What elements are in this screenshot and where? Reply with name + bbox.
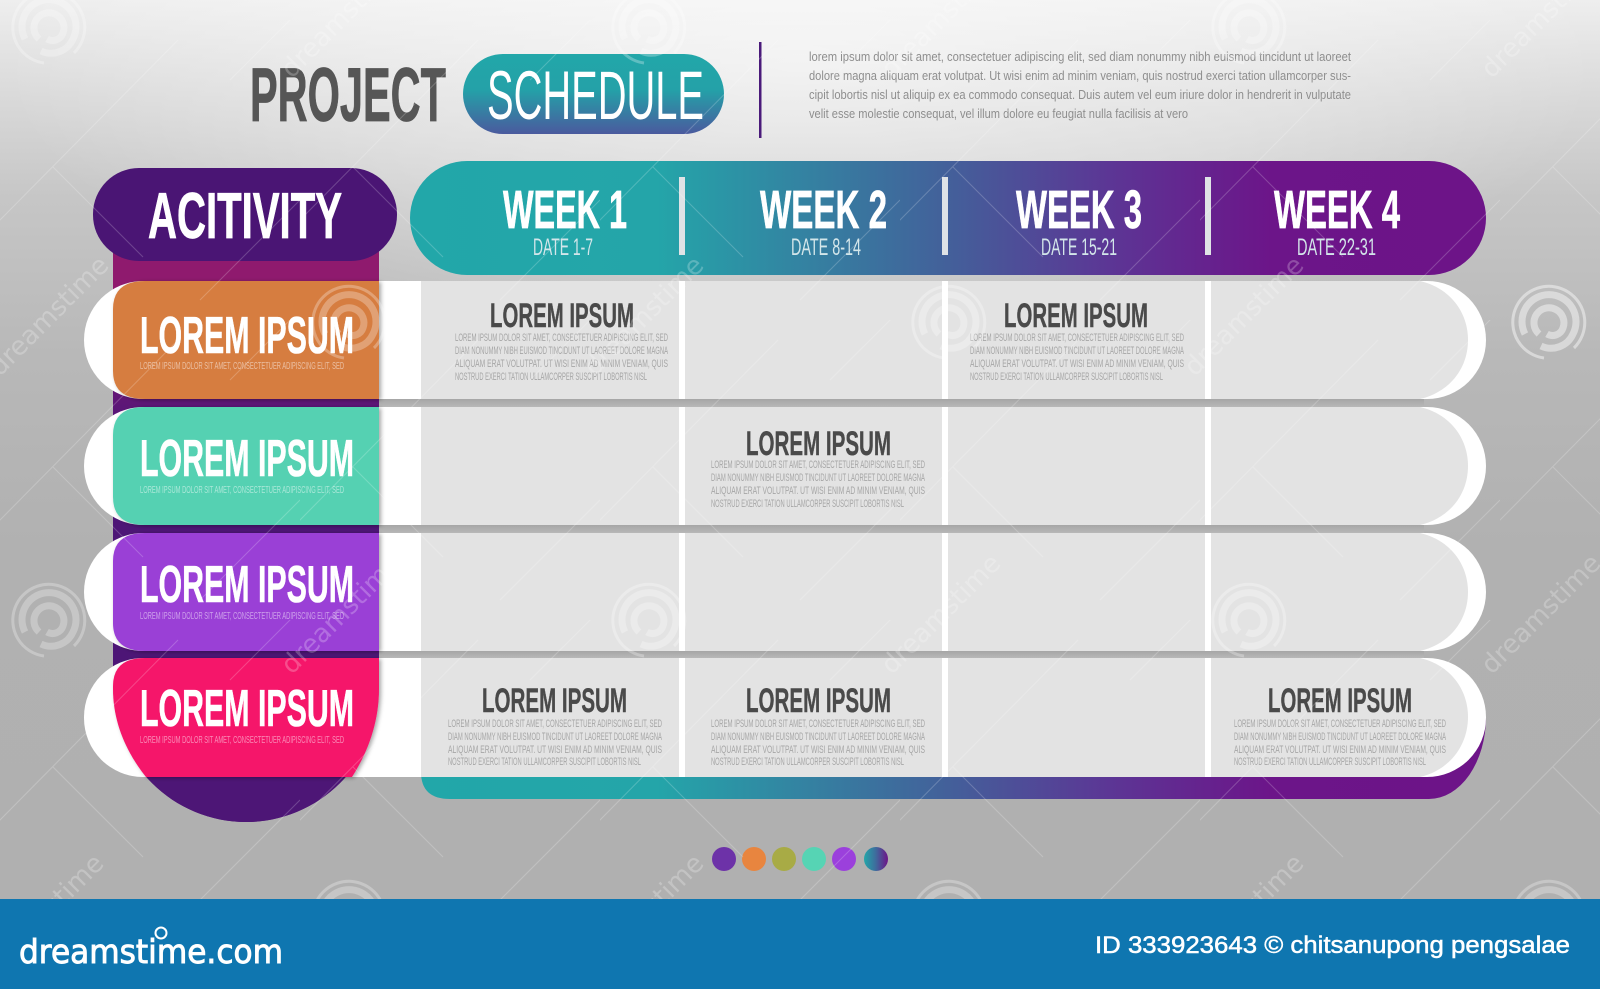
cell: row 4 week 2: LOREM IPSUM	[746, 682, 891, 720]
week 3: WEEK 3	[1016, 180, 1142, 240]
footer credit: ID 333923643 © chitsanupong pengsalae	[1095, 932, 1570, 959]
cell: row 4 week 4: LOREM IPSUM	[1268, 682, 1412, 720]
watermark: dreamstime	[579, 251, 710, 382]
cell: row 4 week 1: NOSTRUD EXERCI TATION ULLAMCORPER SUSCIPIT LOBORTIS NISL	[448, 756, 641, 768]
cell: row 1 week 1: ALIQUAM ERAT VOLUTPAT. UT WISI ENIM AD MINIM VENIAM, QUIS	[455, 358, 668, 370]
cell: row 4 week 2: NOSTRUD EXERCI TATION ULLAMCORPER SUSCIPIT LOBORTIS NISL	[711, 756, 904, 768]
row 2 cell separators	[679, 407, 1211, 525]
week 2	[760, 180, 887, 261]
activity column backing	[113, 240, 379, 822]
cell: row 4 week 2	[711, 682, 925, 768]
cell: row 4 week 4: ALIQUAM ERAT VOLUTPAT. UT WISI ENIM AD MINIM VENIAM, QUIS	[1234, 744, 1446, 756]
week 1	[503, 180, 627, 261]
label: row 1 orange: LOREM IPSUM DOLOR SIT AMET, CONSECTETUER ADIPISCING ELIT, SED	[140, 361, 344, 372]
cell: row 1 week 3: LOREM IPSUM	[1004, 297, 1148, 335]
watermark: dreamstime	[579, 849, 710, 980]
row 4	[84, 658, 1486, 777]
week 2: DATE 8-14	[791, 234, 861, 261]
header	[250, 42, 1351, 138]
week header bar	[410, 161, 1486, 275]
row 3 cell separators	[679, 533, 1211, 651]
week separators	[679, 177, 1211, 255]
label: row 4 pink: LOREM IPSUM	[140, 680, 354, 738]
row 1	[84, 281, 1486, 399]
cell: row 2 week 2: NOSTRUD EXERCI TATION ULLAMCORPER SUSCIPIT LOBORTIS NISL	[711, 498, 904, 510]
cell: row 4 week 1: LOREM IPSUM DOLOR SIT AMET, CONSECTETUER ADIPISCING ELIT, SED	[448, 718, 662, 730]
intro text: cipit lobortis nisl ut aliquip ex ea commodo consequat. Duis autem vel eum iriure dolor in hendrerit in vulputate	[809, 88, 1351, 102]
row 3	[84, 533, 1486, 651]
week 2: WEEK 2	[760, 180, 887, 240]
watermark: dreamstime	[876, 549, 1007, 680]
cell: row 4 week 1: ALIQUAM ERAT VOLUTPAT. UT WISI ENIM AD MINIM VENIAM, QUIS	[448, 744, 662, 756]
activity header: ACITIVITY	[148, 179, 342, 252]
label: row 3 purple: LOREM IPSUM DOLOR SIT AMET, CONSECTETUER ADIPISCING ELIT, SED	[140, 611, 344, 622]
title pill: SCHEDULE: SCHEDULE	[487, 57, 704, 134]
row 2	[84, 407, 1486, 525]
label: row 4 pink	[113, 658, 379, 777]
footer bar	[0, 899, 1600, 989]
header divider	[759, 42, 762, 138]
label: row 2 teal: LOREM IPSUM DOLOR SIT AMET, CONSECTETUER ADIPISCING ELIT, SED	[140, 485, 344, 496]
label: row 1 orange	[113, 281, 379, 399]
cell: row 1 week 3: DIAM NONUMMY NIBH EUISMOD TINCIDUNT UT LAOREET DOLORE MAGNA	[970, 345, 1184, 357]
cell: row 1 week 1: NOSTRUD EXERCI TATION ULLAMCORPER SUSCIPIT LOBORTIS NISL	[455, 371, 647, 383]
cell: row 2 week 2	[711, 425, 925, 510]
intro text: velit esse molestie consequat, vel illum dolore eu feugiat nulla facilisis at vero	[809, 107, 1188, 121]
title: PROJECT: PROJECT	[250, 53, 446, 138]
title pill: SCHEDULE	[463, 54, 724, 134]
intro text	[809, 50, 1351, 121]
cell: row 4 week 1	[448, 682, 662, 768]
intro text: dolore magna aliquam erat volutpat. Ut wisi enim ad minim veniam, quis nostrud exerci tation ullamcorper sus-	[809, 69, 1351, 83]
week 1: DATE 1-7	[533, 234, 593, 261]
cell: row 2 week 2: LOREM IPSUM	[746, 425, 891, 463]
week 4: DATE 22-31	[1297, 234, 1376, 261]
label: row 2 teal: LOREM IPSUM	[140, 430, 354, 488]
cell: row 1 week 3: LOREM IPSUM DOLOR SIT AMET, CONSECTETUER ADIPISCING ELIT, SED	[970, 332, 1184, 344]
week 3: DATE 15-21	[1041, 234, 1117, 261]
watermark: dreamstime	[276, 549, 407, 680]
cell: row 2 week 2: DIAM NONUMMY NIBH EUISMOD TINCIDUNT UT LAOREET DOLORE MAGNA	[711, 472, 925, 484]
watermark: dreamstime	[1179, 849, 1310, 980]
label: row 2 teal	[113, 407, 379, 525]
label: row 1 orange: LOREM IPSUM	[140, 307, 354, 365]
cell: row 4 week 4: NOSTRUD EXERCI TATION ULLAMCORPER SUSCIPIT LOBORTIS NISL	[1234, 756, 1426, 768]
watermark: dreamstime	[1179, 251, 1310, 382]
column lower purple	[146, 777, 346, 822]
week 1: WEEK 1	[503, 180, 627, 240]
row 1 cell separators	[679, 281, 1211, 399]
row 4 cell separators	[679, 658, 1211, 777]
cell: row 1 week 1: LOREM IPSUM DOLOR SIT AMET, CONSECTETUER ADIPISCING ELIT, SED	[455, 332, 668, 344]
intro text: lorem ipsum dolor sit amet, consectetuer adipiscing elit, sed diam nonummy nibh euismod tincidunt ut laoreet	[809, 50, 1351, 64]
week 4: WEEK 4	[1274, 180, 1400, 240]
row shadows	[379, 399, 1424, 658]
week 4	[1274, 180, 1400, 261]
footer logo: dreamstime.com	[19, 932, 283, 971]
bottom gradient band	[421, 717, 1486, 799]
cell: row 1 week 3: ALIQUAM ERAT VOLUTPAT. UT WISI ENIM AD MINIM VENIAM, QUIS	[970, 358, 1184, 370]
label: row 4 pink: LOREM IPSUM DOLOR SIT AMET, CONSECTETUER ADIPISCING ELIT, SED	[140, 735, 344, 746]
activity header	[93, 168, 397, 261]
colour dots	[712, 847, 888, 871]
cell: row 4 week 2: LOREM IPSUM DOLOR SIT AMET, CONSECTETUER ADIPISCING ELIT, SED	[711, 718, 925, 730]
cell: row 4 week 1: LOREM IPSUM	[482, 682, 627, 720]
week 3	[1016, 180, 1142, 261]
cell: row 4 week 1: DIAM NONUMMY NIBH EUISMOD TINCIDUNT UT LAOREET DOLORE MAGNA	[448, 731, 662, 743]
cell: row 2 week 2: LOREM IPSUM DOLOR SIT AMET, CONSECTETUER ADIPISCING ELIT, SED	[711, 459, 925, 471]
cell: row 1 week 3	[970, 297, 1184, 383]
label: row 3 purple: LOREM IPSUM	[140, 556, 354, 614]
cell: row 1 week 1: DIAM NONUMMY NIBH EUISMOD TINCIDUNT UT LAOREET DOLORE MAGNA	[455, 345, 668, 357]
cell: row 4 week 2: ALIQUAM ERAT VOLUTPAT. UT WISI ENIM AD MINIM VENIAM, QUIS	[711, 744, 925, 756]
cell: row 1 week 3: NOSTRUD EXERCI TATION ULLAMCORPER SUSCIPIT LOBORTIS NISL	[970, 371, 1163, 383]
cell: row 4 week 2: DIAM NONUMMY NIBH EUISMOD TINCIDUNT UT LAOREET DOLORE MAGNA	[711, 731, 925, 743]
label: row 3 purple	[113, 533, 379, 651]
cell: row 2 week 2: ALIQUAM ERAT VOLUTPAT. UT WISI ENIM AD MINIM VENIAM, QUIS	[711, 485, 925, 497]
cell: row 4 week 4	[1234, 682, 1446, 768]
cell: row 1 week 1	[455, 297, 668, 383]
cell: row 1 week 1: LOREM IPSUM	[490, 297, 634, 335]
